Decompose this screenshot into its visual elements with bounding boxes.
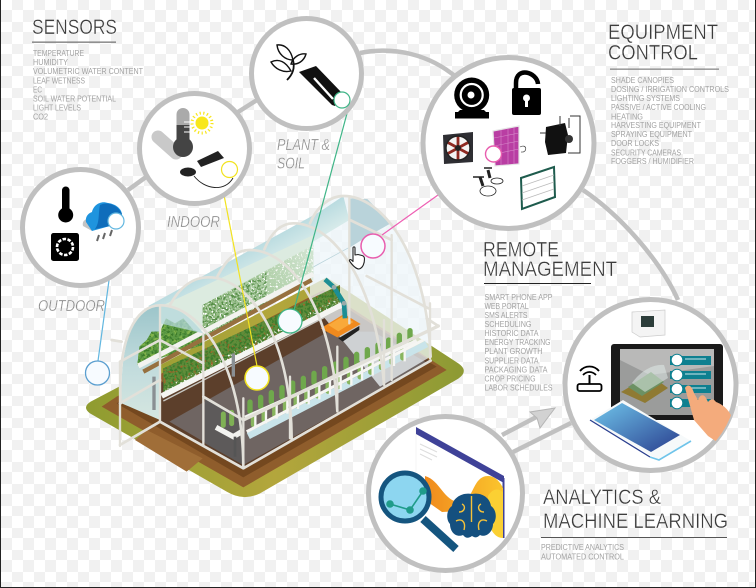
frame: arches: [120, 196, 431, 467]
text block: equipment list: SHADE CANOPIES: [611, 76, 674, 85]
text block: equipment list: FOGGERS / HUMIDIFIER: [611, 157, 694, 166]
panel: outdoor sensors: [22, 170, 138, 286]
text block: analytics list: [541, 543, 624, 562]
lower shelf and posts: [154, 305, 342, 410]
text block: remote management list: SMART PHONE APP: [484, 293, 552, 302]
icon: thermometer with shadow: [158, 108, 193, 157]
icon: light sensor with cable: [180, 151, 233, 188]
greenhouse floor: [127, 293, 430, 467]
heading: equipment control: [608, 21, 719, 70]
icon: wifi router: [578, 366, 602, 391]
text block: remote management list: CROP PRICING: [484, 374, 536, 384]
robot arm: [321, 279, 361, 342]
callout line: indoor: [224, 195, 257, 366]
icon: soil probe: [299, 66, 342, 106]
text block: remote management list: LABOR SCHEDULES: [484, 384, 552, 392]
heading: analytics and machine learning: [541, 486, 728, 538]
panel: plant and soil sensors: [252, 18, 362, 128]
dashboard pills: [670, 356, 711, 407]
hotspot: outdoor in greenhouse: [86, 361, 110, 385]
text block: remote management list: PLANT GROWTH: [484, 347, 543, 356]
text block: sensor list: TEMPERATURE: [33, 49, 84, 58]
text block: analytics list: AUTOMATED CONTROL: [541, 552, 624, 562]
front plant row: [216, 331, 427, 457]
text block: sensor list: CO2: [33, 112, 48, 122]
lower plant bench: [154, 285, 342, 410]
text block: equipment list: [611, 76, 729, 166]
text block: remote management list: PACKAGING DATA: [484, 366, 548, 374]
browser window: [416, 427, 504, 538]
text block: remote management list: SCHEDULING: [484, 320, 532, 329]
icon: leaves: [271, 45, 306, 80]
icon: phone: [590, 400, 691, 460]
icon: louver window: [521, 167, 555, 209]
text block: remote management list: [484, 293, 552, 392]
icon: brain: [447, 494, 496, 538]
heading: sensors: SENSORS: [32, 16, 117, 39]
text block: remote management list: WEB PORTAL: [484, 302, 529, 311]
ground: soil border and door step: [102, 290, 447, 487]
text block: equipment list: SPRAYING EQUIPMENT: [611, 130, 692, 139]
side glass behind plants: [160, 235, 313, 363]
arrow: analytics to remote management: [502, 408, 555, 435]
text block: remote management list: SMS ALERTS: [484, 311, 528, 320]
hotspot: indoor in greenhouse: [245, 366, 269, 390]
icon: hand cursor: [349, 247, 364, 269]
panel: remote management: [565, 300, 736, 470]
text block: remote management list: ENERGY TRACKING: [484, 338, 550, 347]
icon: heater machine: [540, 116, 580, 155]
icon: thermometer: [58, 186, 73, 222]
label: outdoor: OUTDOOR: [38, 298, 105, 315]
shaded ceiling glass: [312, 198, 391, 268]
icon: exhaust fan: [443, 132, 473, 164]
label: plant and soil: SOIL: [277, 156, 305, 172]
panel: equipment control: [423, 58, 594, 228]
greenhouse frame: [112, 196, 438, 468]
text block: sensor list: LEAF WETNESS: [33, 76, 85, 86]
heading: remote management: REMOTE: [483, 238, 559, 262]
mini greenhouse: [621, 365, 668, 403]
label: plant and soil: PLANT &: [277, 137, 330, 154]
heading: equipment control: EQUIPMENT: [608, 21, 718, 44]
text block: equipment list: HEATING: [611, 112, 643, 122]
icon: padlock: [512, 72, 541, 115]
icon: hand pressing button: [685, 386, 733, 444]
heading: analytics and machine learning: MACHINE LEARNING: [543, 510, 728, 533]
text block: sensor list: SOIL WATER POTENTIAL: [33, 94, 116, 104]
hotspot: equipment: [486, 146, 502, 162]
greenhouse illustration: [86, 196, 464, 497]
text block: equipment list: PASSIVE / ACTIVE COOLING: [611, 103, 706, 112]
upper plant bench: [137, 245, 313, 372]
callout line: equipment: [382, 160, 487, 235]
text block: sensor list: LIGHT LEVELS: [33, 104, 81, 112]
text block: analytics list: PREDICTIVE ANALYTICS: [541, 543, 624, 552]
hotspot: plant and soil: [334, 92, 350, 108]
icon: controller box: [632, 310, 665, 337]
icon: LED grow panel: [493, 126, 526, 166]
front roof glass pane over bay: [160, 305, 203, 333]
heading: analytics and machine learning: ANALYTICS &: [543, 486, 661, 509]
text block: remote management list: HISTORIC DATA: [484, 329, 539, 338]
icon: rain cloud: [83, 202, 122, 241]
hotspot: indoor: [222, 162, 238, 178]
upper foliage: hazy far bays: [203, 245, 313, 338]
dashboard buttons: [671, 354, 683, 409]
heading: remote management: MANAGEMENT: [483, 258, 617, 281]
text block: equipment list: DOOR LOCKS: [611, 139, 659, 148]
text block: equipment list: SECURITY CAMERAS: [611, 148, 681, 158]
back gable glass: [310, 196, 431, 387]
label: indoor: INDOOR: [167, 214, 220, 231]
text block: sensor list: VOLUMETRIC WATER CONTENT: [33, 67, 143, 76]
frame: verticals: [120, 198, 430, 468]
heading: remote management: [483, 238, 617, 284]
text block: equipment list: HARVESTING EQUIPMENT: [611, 121, 701, 130]
panel: analytics and machine learning: [368, 416, 522, 570]
heading: equipment control: CONTROL: [608, 42, 698, 64]
icon: camera: [454, 78, 489, 118]
callout line: plant and soil: [294, 106, 349, 310]
icon: fogger nozzles: [473, 168, 503, 196]
hotspot: equipment in greenhouse: [361, 234, 385, 258]
text block: equipment list: LIGHTING SYSTEMS: [611, 94, 680, 103]
front gable glass: [121, 305, 160, 420]
icon: weather sensor gear: [51, 233, 79, 261]
text block: remote management list: SUPPLIER DATA: [484, 356, 539, 366]
dashboard pill lines: [685, 359, 706, 388]
text block: sensor list: [33, 49, 143, 122]
hotspot: plant and soil in greenhouse: [278, 309, 302, 333]
roof glass band: [148, 196, 349, 323]
label: plant and soil: [277, 137, 330, 172]
icon: sun: [192, 113, 212, 133]
hotspot: outdoor: [108, 213, 124, 229]
icon: magnifier with graph: [381, 473, 456, 549]
callout line: outdoor: [98, 229, 116, 361]
text block: equipment list: DOSING / IRRIGATION CONTROLS: [611, 85, 729, 94]
ground: olive base: [86, 277, 464, 497]
panel: indoor sensors: [140, 94, 250, 204]
connector lines between circles: [128, 51, 678, 452]
upper foliage: front bay: [137, 318, 203, 365]
text block: sensor list: EC: [33, 86, 42, 94]
frame: base and rails: [112, 220, 438, 468]
chart waves: [425, 476, 503, 538]
upper shelf and plank: [138, 274, 313, 366]
tablet with dashboard: [611, 344, 723, 420]
text block: sensor list: HUMIDITY: [33, 58, 69, 67]
lower foliage: [163, 285, 340, 397]
